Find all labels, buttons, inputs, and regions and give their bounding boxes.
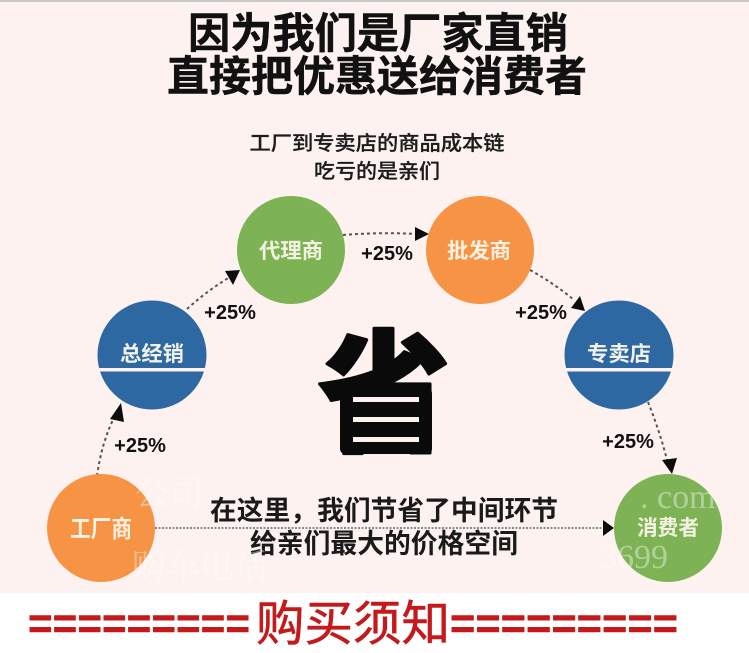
- notice banner: =========: [28, 599, 250, 648]
- watermark: . com: [640, 479, 716, 516]
- circle: wholesaler: 批发商: [447, 240, 511, 263]
- circle: consumer: [614, 474, 722, 582]
- notice banner: 购买须知: [256, 598, 450, 651]
- circle: factory: [47, 474, 155, 582]
- watermark: 购车电话: [132, 548, 268, 586]
- arrow: distributor to agent: [187, 270, 240, 309]
- arrow: agent to wholesaler: [343, 227, 429, 241]
- circle: wholesaler: [426, 196, 534, 304]
- arrow: wholesaler to store: [530, 270, 585, 311]
- notice banner: [28, 598, 678, 651]
- callout text: [210, 496, 558, 559]
- title: [167, 10, 587, 100]
- arrow: factory direct to consumer: [155, 520, 614, 536]
- big character: save: 省: [318, 322, 450, 469]
- percentage labels: +25%: [204, 302, 256, 324]
- arrow: factory to distributor: [97, 403, 124, 476]
- percentage labels: +25%: [361, 243, 413, 265]
- subtitle: 吃亏的是亲们: [314, 160, 440, 183]
- percentage labels: [114, 243, 654, 457]
- circle: consumer: 消费者: [637, 517, 699, 540]
- percentage labels: +25%: [602, 431, 654, 453]
- percentage labels: +25%: [515, 302, 567, 324]
- circle: distributor: 总经销: [120, 343, 184, 366]
- title: 因为我们是厂家直销: [188, 10, 568, 57]
- watermark: 公司: [135, 476, 203, 513]
- title: 直接把优惠送给消费者: [167, 53, 587, 100]
- callout text: 给亲们最大的价格空间: [250, 529, 518, 559]
- arrow: store to consumer: [648, 402, 677, 474]
- watermark: [132, 476, 716, 586]
- circle: agent: 代理商: [259, 240, 323, 263]
- circle: specialty store: [564, 300, 674, 410]
- callout text: 在这里，我们节省了中间环节: [210, 496, 558, 526]
- circle: distributor: [97, 300, 207, 410]
- circle: agent: [237, 196, 345, 304]
- watermark: 3699: [600, 539, 668, 576]
- notice banner: =========: [450, 599, 678, 648]
- subtitle: [250, 132, 504, 183]
- subtitle: 工厂到专卖店的商品成本链: [250, 132, 504, 155]
- circle: specialty store: 专卖店: [587, 343, 651, 366]
- circle: factory: 工厂商: [70, 516, 132, 543]
- percentage labels: +25%: [114, 435, 166, 457]
